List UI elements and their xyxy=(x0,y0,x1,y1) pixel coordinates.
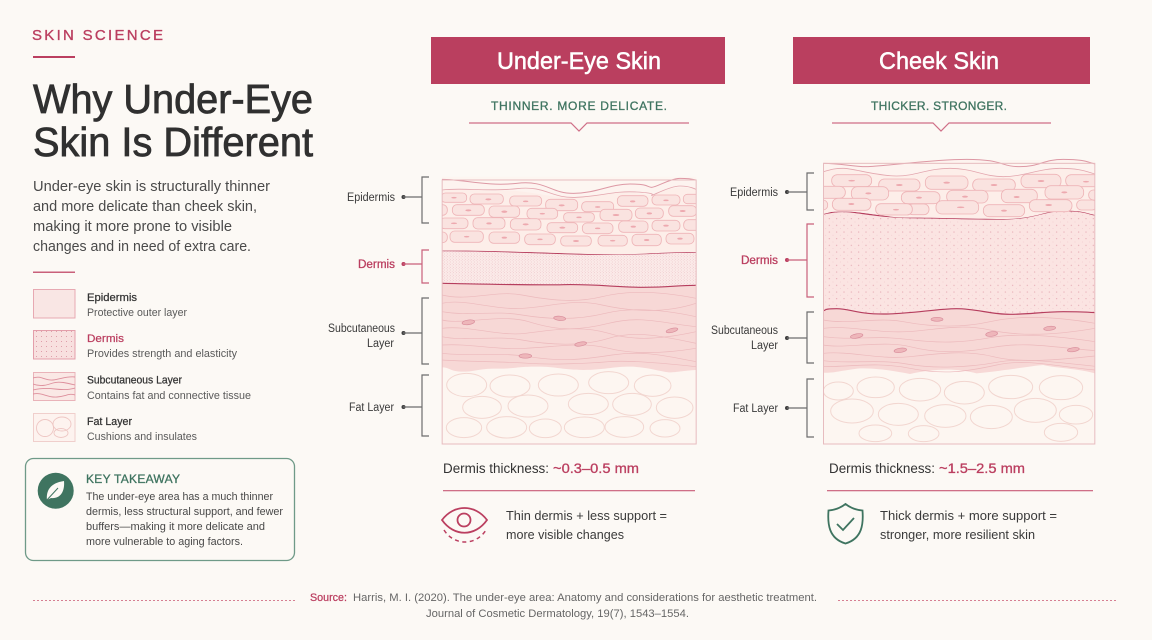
legend xyxy=(33,290,251,443)
label: epidermis xyxy=(730,173,814,210)
bracket labels: under-eye xyxy=(328,177,429,436)
label: fat layer: Fat Layer xyxy=(733,403,778,415)
bracket labels: cheek xyxy=(711,173,814,437)
label: dermis: Dermis xyxy=(741,255,778,267)
legend: dermis: Dermis xyxy=(87,333,125,345)
note: thin dermis: more visible changes xyxy=(506,528,624,542)
note: thick dermis: stronger, more resilient skin xyxy=(880,528,1035,542)
epidermis layer xyxy=(817,159,1104,219)
label: subcutaneous layer xyxy=(711,312,814,363)
source footer: Harris, M. I. (2020). The under-eye area: Anatomy and considerations for aesthetic treatment. xyxy=(353,592,817,604)
label: epidermis xyxy=(347,177,429,223)
banner: under-eye skin xyxy=(431,37,725,84)
skin cross-section: cheek xyxy=(817,159,1104,444)
panel: cheek skin xyxy=(711,37,1104,544)
source footer xyxy=(33,592,1116,620)
key takeaway callout: The under-eye area has a much thinner xyxy=(86,491,273,503)
legend: fat layer: Fat Layer xyxy=(87,416,132,428)
intro text: Under-eye skin is structurally thinner xyxy=(33,179,270,195)
label: fat layer xyxy=(733,379,814,437)
title: Skin Is Different xyxy=(33,119,313,165)
label: epidermis: Epidermis xyxy=(730,187,778,199)
legend: epidermis: Epidermis xyxy=(87,292,138,304)
note: thin dermis xyxy=(506,509,667,542)
eyebrow: skin science: SKIN SCIENCE xyxy=(32,27,163,44)
label: subcutaneous layer: Layer xyxy=(751,340,778,352)
intro text xyxy=(33,179,270,255)
label: fat layer xyxy=(349,375,429,436)
legend: subcutaneous layer: Contains fat and connective tissue xyxy=(87,390,251,402)
subtitle: THICKER. STRONGER. xyxy=(871,99,1007,113)
legend: epidermis xyxy=(34,290,187,319)
dermis thickness: cheek xyxy=(829,461,1025,476)
dermis layer xyxy=(823,211,1095,314)
banner: under-eye skin: Under-Eye Skin xyxy=(497,48,661,75)
epidermis layer xyxy=(433,178,707,254)
label: epidermis: Epidermis xyxy=(347,192,395,204)
note: thick dermis: Thick dermis + more support = xyxy=(880,509,1057,523)
label: subcutaneous layer: Layer xyxy=(367,338,394,350)
banner: cheek skin xyxy=(793,37,1090,84)
label: dermis xyxy=(358,250,429,283)
key takeaway callout: KEY TAKEAWAY xyxy=(86,472,180,486)
label: subcutaneous layer: Subcutaneous xyxy=(711,325,778,337)
title xyxy=(33,76,313,165)
label: subcutaneous layer xyxy=(328,298,429,364)
legend: dermis: Provides strength and elasticity xyxy=(87,348,237,360)
skin cross-section: under-eye xyxy=(433,177,707,444)
subtitle: THINNER. MORE DELICATE. xyxy=(491,99,667,113)
source footer: Journal of Cosmetic Dermatology, 19(7), 1543–1554. xyxy=(426,608,689,620)
dermis thickness: cheek: ~1.5–2.5 mm xyxy=(939,461,1025,476)
intro text: and more delicate than cheek skin, xyxy=(33,199,257,215)
icon: shield xyxy=(828,504,863,544)
dermis thickness: cheek: Dermis thickness: xyxy=(829,461,935,476)
icon: leaf xyxy=(38,473,74,509)
legend: subcutaneous layer xyxy=(33,372,251,402)
icon: eye xyxy=(442,508,487,542)
dermis layer xyxy=(442,251,696,287)
dermis thickness: under-eye: ~0.3–0.5 mm xyxy=(553,461,639,476)
label: fat layer: Fat Layer xyxy=(349,402,394,414)
banner: cheek skin: Cheek Skin xyxy=(879,48,999,75)
title: Why Under-Eye xyxy=(33,76,313,122)
source footer: Source: xyxy=(310,592,347,604)
intro text: making it more prone to visible xyxy=(33,219,232,235)
note: thick dermis xyxy=(880,509,1057,542)
legend: fat layer xyxy=(34,414,197,443)
eyebrow: skin science xyxy=(32,27,163,58)
dermis thickness: under-eye: Dermis thickness: xyxy=(443,461,549,476)
legend: dermis xyxy=(34,330,237,360)
subcutaneous layer xyxy=(442,282,696,372)
key takeaway callout: dermis, less structural support, and fewer xyxy=(86,506,283,518)
note: thin dermis: Thin dermis + less support = xyxy=(506,509,667,523)
label: dermis: Dermis xyxy=(358,259,395,271)
panel: under-eye skin xyxy=(328,37,725,542)
intro text: changes and in need of extra care. xyxy=(33,239,251,255)
fat layer cells xyxy=(823,375,1093,442)
legend: epidermis: Protective outer layer xyxy=(87,307,187,319)
key takeaway callout: buffers—making it more delicate and xyxy=(86,521,265,533)
label: subcutaneous layer: Subcutaneous xyxy=(328,323,395,335)
key takeaway callout: more vulnerable to aging factors. xyxy=(86,536,243,548)
label: dermis xyxy=(741,224,814,297)
dermis thickness: under-eye xyxy=(443,461,639,476)
subcutaneous layer xyxy=(823,307,1095,374)
fat layer cells xyxy=(446,372,693,438)
legend: subcutaneous layer: Subcutaneous Layer xyxy=(87,374,182,386)
key takeaway callout xyxy=(26,458,294,560)
legend: fat layer: Cushions and insulates xyxy=(87,431,197,443)
